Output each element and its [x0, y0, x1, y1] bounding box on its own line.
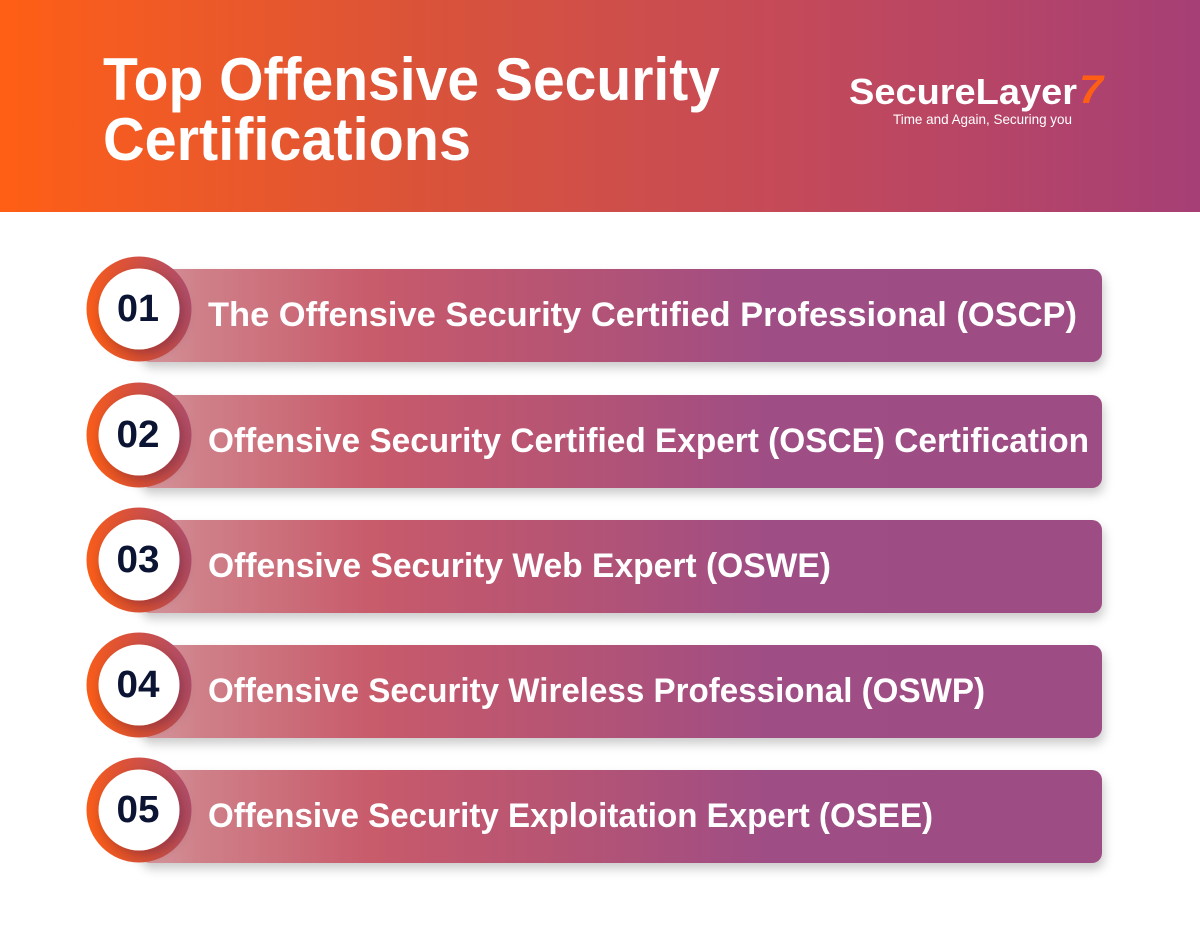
item 05	[86, 758, 1102, 863]
logo: SecureLayer7: Time and Again, Securing you	[893, 111, 1072, 127]
bar: item 04	[140, 645, 1102, 738]
number: 01: 01	[117, 288, 159, 330]
bar: item 01	[140, 269, 1102, 362]
badge disc: item 05	[98, 770, 180, 850]
badge ring: item 03	[86, 508, 192, 612]
label: item 05: Offensive Security Exploitation Expert (OSEE)	[208, 797, 933, 835]
badge ring: item 02	[86, 382, 192, 488]
label: item 04: Offensive Security Wireless Professional (OSWP)	[208, 672, 985, 710]
label: item 01: The Offensive Security Certified Professional (OSCP)	[208, 296, 1077, 334]
title	[103, 46, 721, 173]
title: Top Offensive Security	[103, 46, 721, 113]
label: item 02: Offensive Security Certified Expert (OSCE) Certification	[208, 422, 1089, 460]
logo: SecureLayer7: 7	[1079, 68, 1105, 112]
title: Certifications	[103, 106, 471, 173]
badge ring: item 04	[86, 632, 192, 738]
item 03	[86, 508, 1102, 613]
number: 04: 04	[116, 664, 160, 706]
item 04	[86, 632, 1102, 738]
bar: item 05	[140, 770, 1102, 863]
number: 05: 05	[116, 789, 160, 831]
badge ring: item 05	[86, 758, 192, 862]
label: item 03: Offensive Security Web Expert (OSWE)	[208, 547, 831, 585]
item 01	[86, 256, 1102, 362]
badge disc: item 04	[98, 644, 180, 726]
logo: SecureLayer7: SecureLayer	[849, 71, 1077, 112]
header banner	[0, 0, 1200, 212]
number: 02: 02	[116, 414, 160, 456]
badge disc: item 02	[98, 394, 180, 476]
badge ring: item 01	[86, 256, 192, 362]
bar: item 03	[140, 520, 1102, 613]
logo: SecureLayer7	[849, 68, 1105, 127]
number: 03: 03	[116, 539, 160, 581]
item 02	[86, 382, 1102, 488]
bar: item 02	[140, 395, 1102, 488]
badge disc: item 03	[98, 520, 180, 600]
badge disc: item 01	[98, 268, 180, 350]
